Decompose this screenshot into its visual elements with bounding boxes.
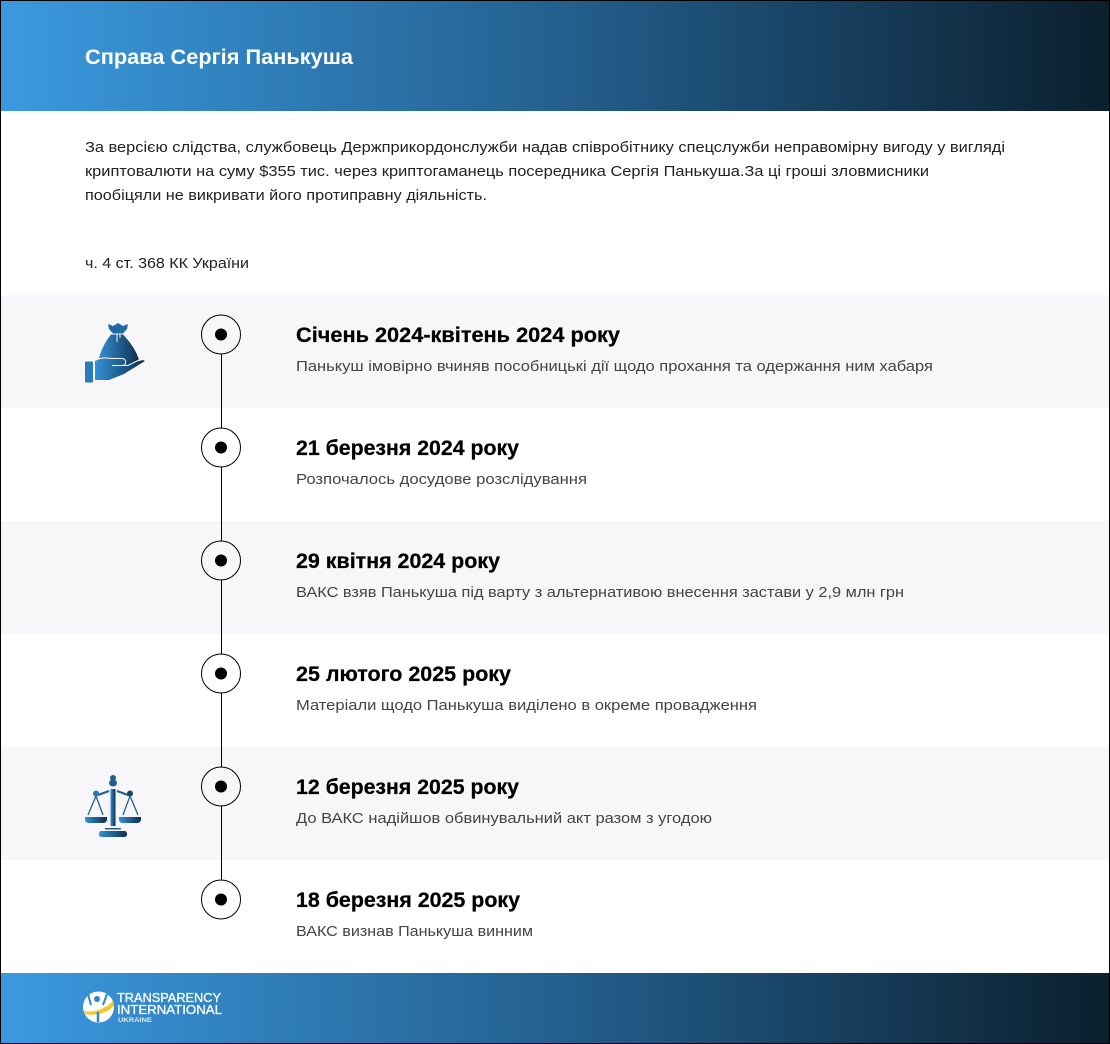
marker 3 (202, 541, 240, 580)
timeline line (220, 334, 222, 900)
timeline item 1 (202, 315, 933, 375)
intro text (85, 139, 1005, 204)
title: Справа Сергія Панькуша (85, 46, 353, 69)
legal article: ч. 4 ст. 368 КК України (85, 255, 249, 272)
logo: Transparency International Ukraine (83, 991, 222, 1024)
date 6: 18 березня 2025 року (296, 889, 520, 912)
description 2: Розпочалось досудове розслідування (296, 471, 587, 488)
description 5: До ВАКС надійшов обвинувальний акт разом з угодою (296, 810, 712, 827)
marker 6 (202, 880, 240, 919)
timeline item 3 (202, 541, 904, 601)
marker 5 (202, 767, 240, 806)
intro text: пообіцяли не викривати його протиправну діяльність. (85, 187, 487, 204)
intro text: криптовалюти на суму $355 тис. через криптогаманець посередника Сергія Панькуша.За ці гроші зловмисники (85, 163, 929, 180)
row background 1 (1, 295, 1109, 408)
description 3: ВАКС взяв Панькуша під варту з альтернативою внесення застави у 2,9 млн грн (296, 584, 904, 601)
timeline item 2 (202, 428, 587, 488)
date 3: 29 квітня 2024 року (296, 550, 500, 573)
timeline item 5 (202, 767, 712, 827)
row background 5 (1, 747, 1109, 860)
date 2: 21 березня 2024 року (296, 437, 519, 460)
description 6: ВАКС визнав Панькуша винним (296, 923, 533, 940)
icon: scales of justice (85, 775, 141, 837)
footer band (1, 973, 1109, 1043)
marker 1 (202, 315, 240, 354)
date 4: 25 лютого 2025 року (296, 663, 511, 686)
date 5: 12 березня 2025 року (296, 776, 519, 799)
timeline item 6 (202, 880, 533, 940)
icon: money bag on hand (85, 323, 145, 382)
row background 3 (1, 521, 1109, 634)
marker 2 (202, 428, 240, 467)
logo: Transparency International Ukraine: INTERNATIONAL (117, 1003, 222, 1017)
logo: Transparency International Ukraine: TRANSPARENCY (117, 991, 222, 1005)
logo globe (83, 992, 114, 1022)
logo: Transparency International Ukraine: UKRAINE (118, 1018, 152, 1024)
marker 4 (202, 654, 240, 693)
header band (1, 1, 1109, 111)
date 1: Січень 2024-квітень 2024 року (296, 324, 620, 347)
timeline item 4 (202, 654, 757, 714)
description 4: Матеріали щодо Панькуша виділено в окреме провадження (296, 697, 757, 714)
description 1: Панькуш імовірно вчиняв пособницькі дії щодо прохання та одержання ним хабаря (296, 358, 933, 375)
intro text: За версією слідства, службовець Держприкордонслужби надав співробітнику спецслужби неправомірну вигоду у вигляді (85, 139, 1005, 156)
